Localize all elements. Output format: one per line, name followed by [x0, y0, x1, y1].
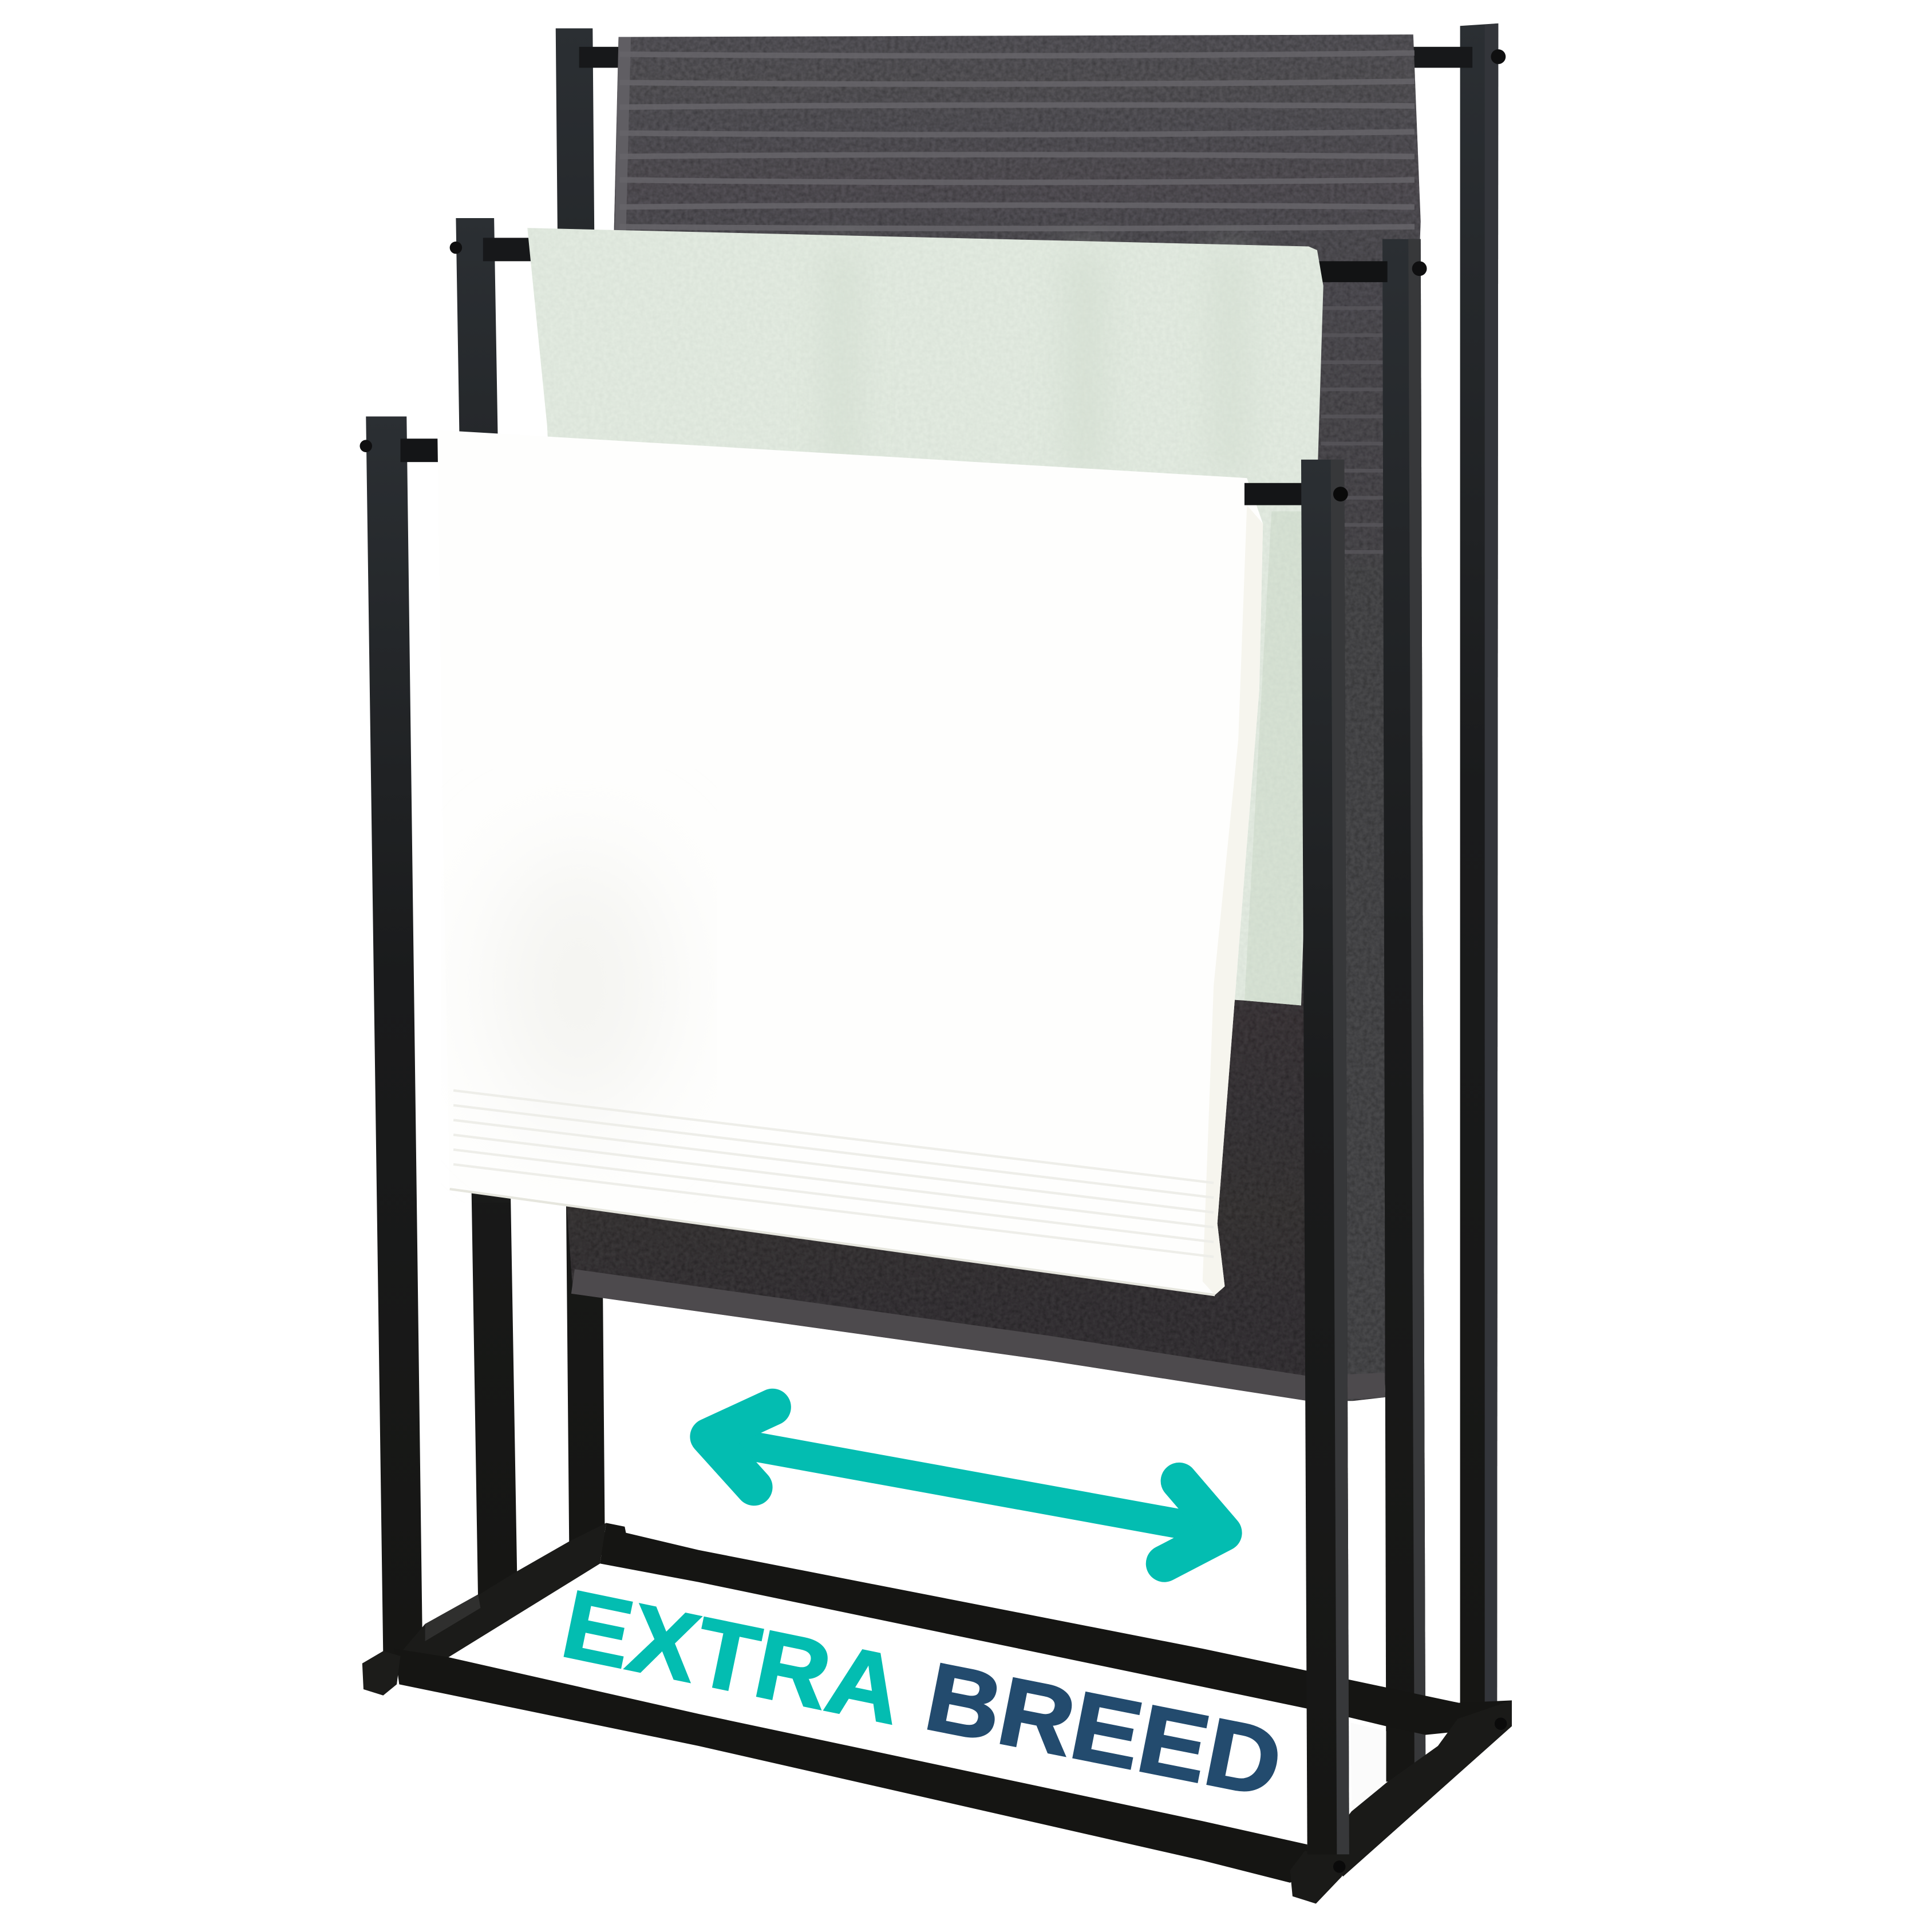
white towel	[437, 430, 1263, 1295]
white towel fold edge	[1203, 505, 1263, 1295]
floor gap between posts	[1350, 1722, 1386, 1811]
dark gray towel	[567, 34, 1421, 1401]
gray towel left edge	[615, 37, 631, 234]
white towel soft shading	[493, 850, 665, 1121]
front rack right post and rail	[1244, 460, 1349, 1854]
front base bar	[394, 1649, 1309, 1883]
back base bar	[600, 1523, 1512, 1735]
left side base bar	[397, 1523, 606, 1657]
green towel folds	[825, 252, 1246, 475]
middle rack frame	[450, 218, 1427, 1781]
back rack frame	[556, 23, 1506, 1720]
gray towel stripes	[620, 53, 1415, 228]
label: extra breed	[554, 1570, 1290, 1818]
gray towel side strip	[1343, 567, 1385, 1401]
right corner foot	[1290, 1851, 1342, 1903]
base frame	[362, 1523, 1512, 1903]
white towel bottom shadow	[450, 1189, 1215, 1295]
gray towel side stripes	[1321, 308, 1385, 552]
left side bar facet	[425, 1594, 480, 1641]
white towel hem lines	[453, 1091, 1214, 1257]
pale green towel	[527, 228, 1323, 1005]
gray towel hem	[573, 1282, 1385, 1389]
left corner foot	[362, 1651, 401, 1696]
label word: extra: EXTRA	[554, 1570, 911, 1744]
front rack left post and rail	[360, 417, 445, 1657]
icon: double-headed arrow	[709, 1407, 1223, 1563]
right side base bar	[1318, 1700, 1512, 1876]
label word: breed: BREED	[918, 1642, 1290, 1818]
